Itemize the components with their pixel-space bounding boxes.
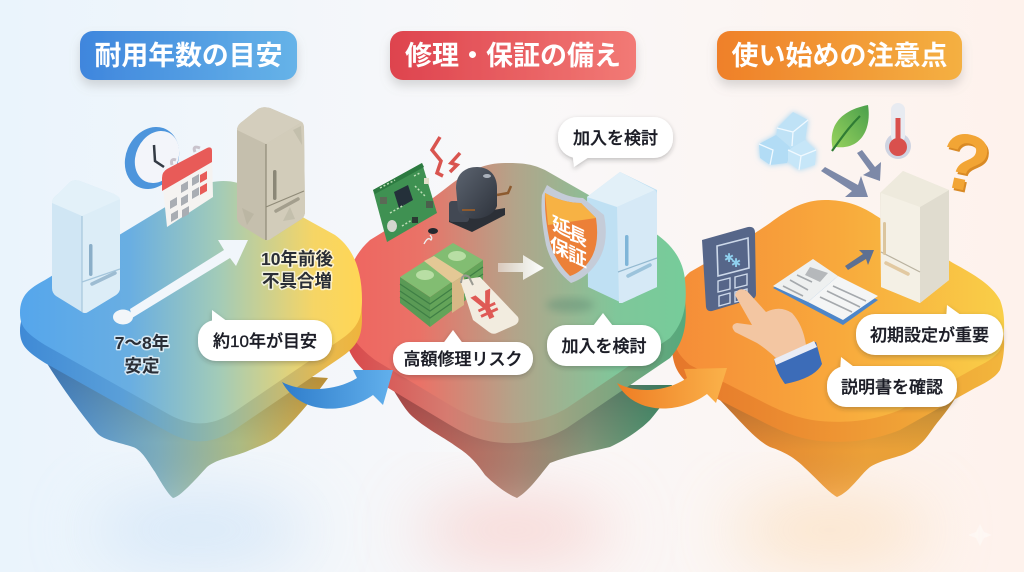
icon: light blue new fridge <box>52 180 120 313</box>
panel: 耐用年数の目安 platform <box>20 181 362 498</box>
icon: circuit board <box>373 163 437 242</box>
arrow: manual to fridge <box>845 250 874 270</box>
label: 7〜8年 安定: 安定 <box>124 356 160 376</box>
icon: question mark: ? <box>932 114 998 211</box>
label: 10年前後 不具合増 <box>261 249 333 291</box>
icon: extended warranty shield <box>542 185 606 312</box>
icon: cream fridge <box>880 171 949 303</box>
icon: stack of money <box>400 243 483 327</box>
icon: extended warranty shield: 証 <box>568 243 587 273</box>
icon: question mark: ? <box>933 116 1000 213</box>
icon: extended warranty shield: 延 <box>552 212 571 243</box>
arrow: blue flow to repair panel <box>282 370 393 409</box>
icon: yen price tag: ¥ <box>467 281 507 331</box>
panel: 修理・保証の備え platform <box>345 163 686 498</box>
arrow: ice to fridge <box>821 167 868 197</box>
icon: lightning sparks <box>432 137 460 176</box>
icon: control panel: ✱ <box>731 256 741 270</box>
icon: ice cubes <box>759 112 816 170</box>
callout: 約10年が目安: 約10年が目安 <box>213 331 317 351</box>
arrow: leaf to fridge <box>857 150 881 181</box>
icon: open manual <box>773 259 878 325</box>
callout: 説明書を確認: 説明書を確認 <box>841 378 943 397</box>
icon: control panel <box>702 227 756 311</box>
callout: 加入を検討 (bottom) <box>547 313 661 366</box>
callout: 高額修理リスク: 高額修理リスク <box>404 350 522 369</box>
arrow: lifetime timeline <box>113 240 248 324</box>
icon: extended warranty shield: 長 <box>568 222 587 252</box>
label: 7〜8年 安定 <box>115 333 169 376</box>
icon: worn beige fridge <box>237 107 305 240</box>
icon: fridge with warranty <box>587 172 657 303</box>
callout: 高額修理リスク <box>393 330 533 375</box>
heading: 使い始めの注意点 <box>717 31 962 80</box>
icon: calendar <box>162 147 213 227</box>
callout: 加入を検討 (top): 加入を検討 <box>573 129 658 148</box>
heading: 耐用年数の目安: 耐用年数の目安 <box>94 41 282 71</box>
heading: 修理・保証の備え: 修理・保証の備え <box>405 41 621 71</box>
callout: 初期設定が重要 <box>856 305 1003 355</box>
panel: 使い始めの注意点 platform <box>672 200 1004 497</box>
icon: compressor <box>424 167 511 244</box>
heading: 修理・保証の備え <box>390 31 636 80</box>
icon: extended warranty shield: 保 <box>550 233 569 264</box>
icon: leaf <box>832 105 869 151</box>
icon: pointing hand with blue cuff <box>732 289 822 384</box>
arrow: money to warranty <box>498 255 544 280</box>
callout: 加入を検討 (top) <box>558 117 673 167</box>
label: 10年前後 不具合増: 10年前後 <box>261 249 333 269</box>
callout: 説明書を確認 <box>827 357 957 407</box>
icon: thermometer <box>885 103 911 159</box>
icon: clock <box>115 118 189 198</box>
icon: yen price tag <box>460 275 519 334</box>
icon: control panel: ✱ <box>724 251 734 265</box>
callout: 加入を検討 (bottom): 加入を検討 <box>562 337 646 356</box>
callout: 初期設定が重要: 初期設定が重要 <box>870 325 989 345</box>
arrow: orange flow to start panel <box>617 368 727 409</box>
callout: 約10年が目安 <box>198 310 332 361</box>
heading: 耐用年数の目安 <box>80 31 297 80</box>
heading: 使い始めの注意点: 使い始めの注意点 <box>732 41 948 71</box>
label: 10年前後 不具合増: 不具合増 <box>262 271 332 291</box>
label: 7〜8年 安定: 7〜8年 <box>115 333 169 353</box>
